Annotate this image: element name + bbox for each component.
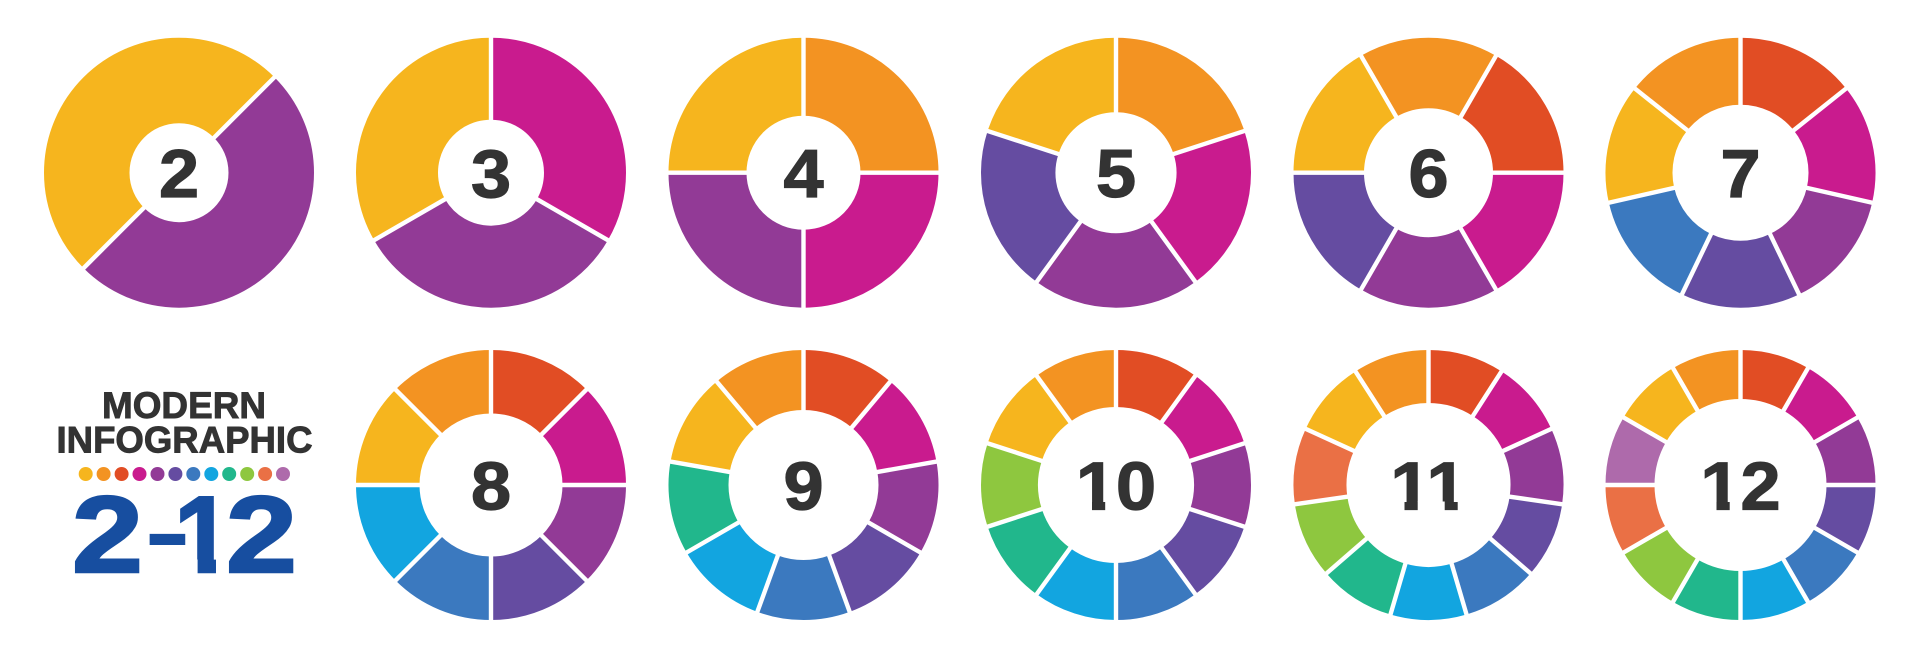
range label 2-12: - [146, 489, 189, 577]
colour dots row [79, 467, 290, 481]
number 2: 2 [159, 136, 199, 212]
number 6: 6 [1408, 136, 1449, 212]
title block [56, 385, 312, 596]
donut chart: 7 segments [1598, 30, 1883, 315]
heading: modern infographic [56, 385, 312, 461]
donut chart: 3 segments [363, 35, 619, 301]
donut chart: 5 segments [979, 35, 1253, 309]
donut chart: 10 segments [967, 336, 1265, 634]
donut chart: 6 segments [1290, 36, 1566, 309]
donut chart: 4 segments [666, 35, 942, 311]
number 10: 10 [1076, 448, 1156, 524]
donut chart: 2 segments [49, 42, 309, 303]
donut chart: 8 segments [345, 339, 637, 631]
range label 2-12: 2 [226, 475, 297, 596]
number 8: 8 [471, 448, 511, 524]
range label 2-12 [72, 474, 297, 596]
heading: modern infographic: INFOGRAPHIC [56, 420, 312, 461]
donut chart: 12 segments [1590, 334, 1891, 636]
range label 2-12: 2 [72, 475, 143, 596]
heading: modern infographic: MODERN [102, 385, 266, 426]
donut chart: 9 segments [656, 337, 951, 633]
number 9: 9 [783, 448, 824, 524]
number 11: 11 [1390, 448, 1467, 524]
number 5: 5 [1096, 136, 1136, 212]
number 4: 4 [783, 136, 824, 212]
range label 2-12: 1 [174, 474, 232, 596]
number 7: 7 [1720, 136, 1761, 212]
number 3: 3 [471, 136, 511, 212]
number 12: 12 [1700, 448, 1781, 524]
donut chart: 11 segments [1275, 332, 1582, 638]
